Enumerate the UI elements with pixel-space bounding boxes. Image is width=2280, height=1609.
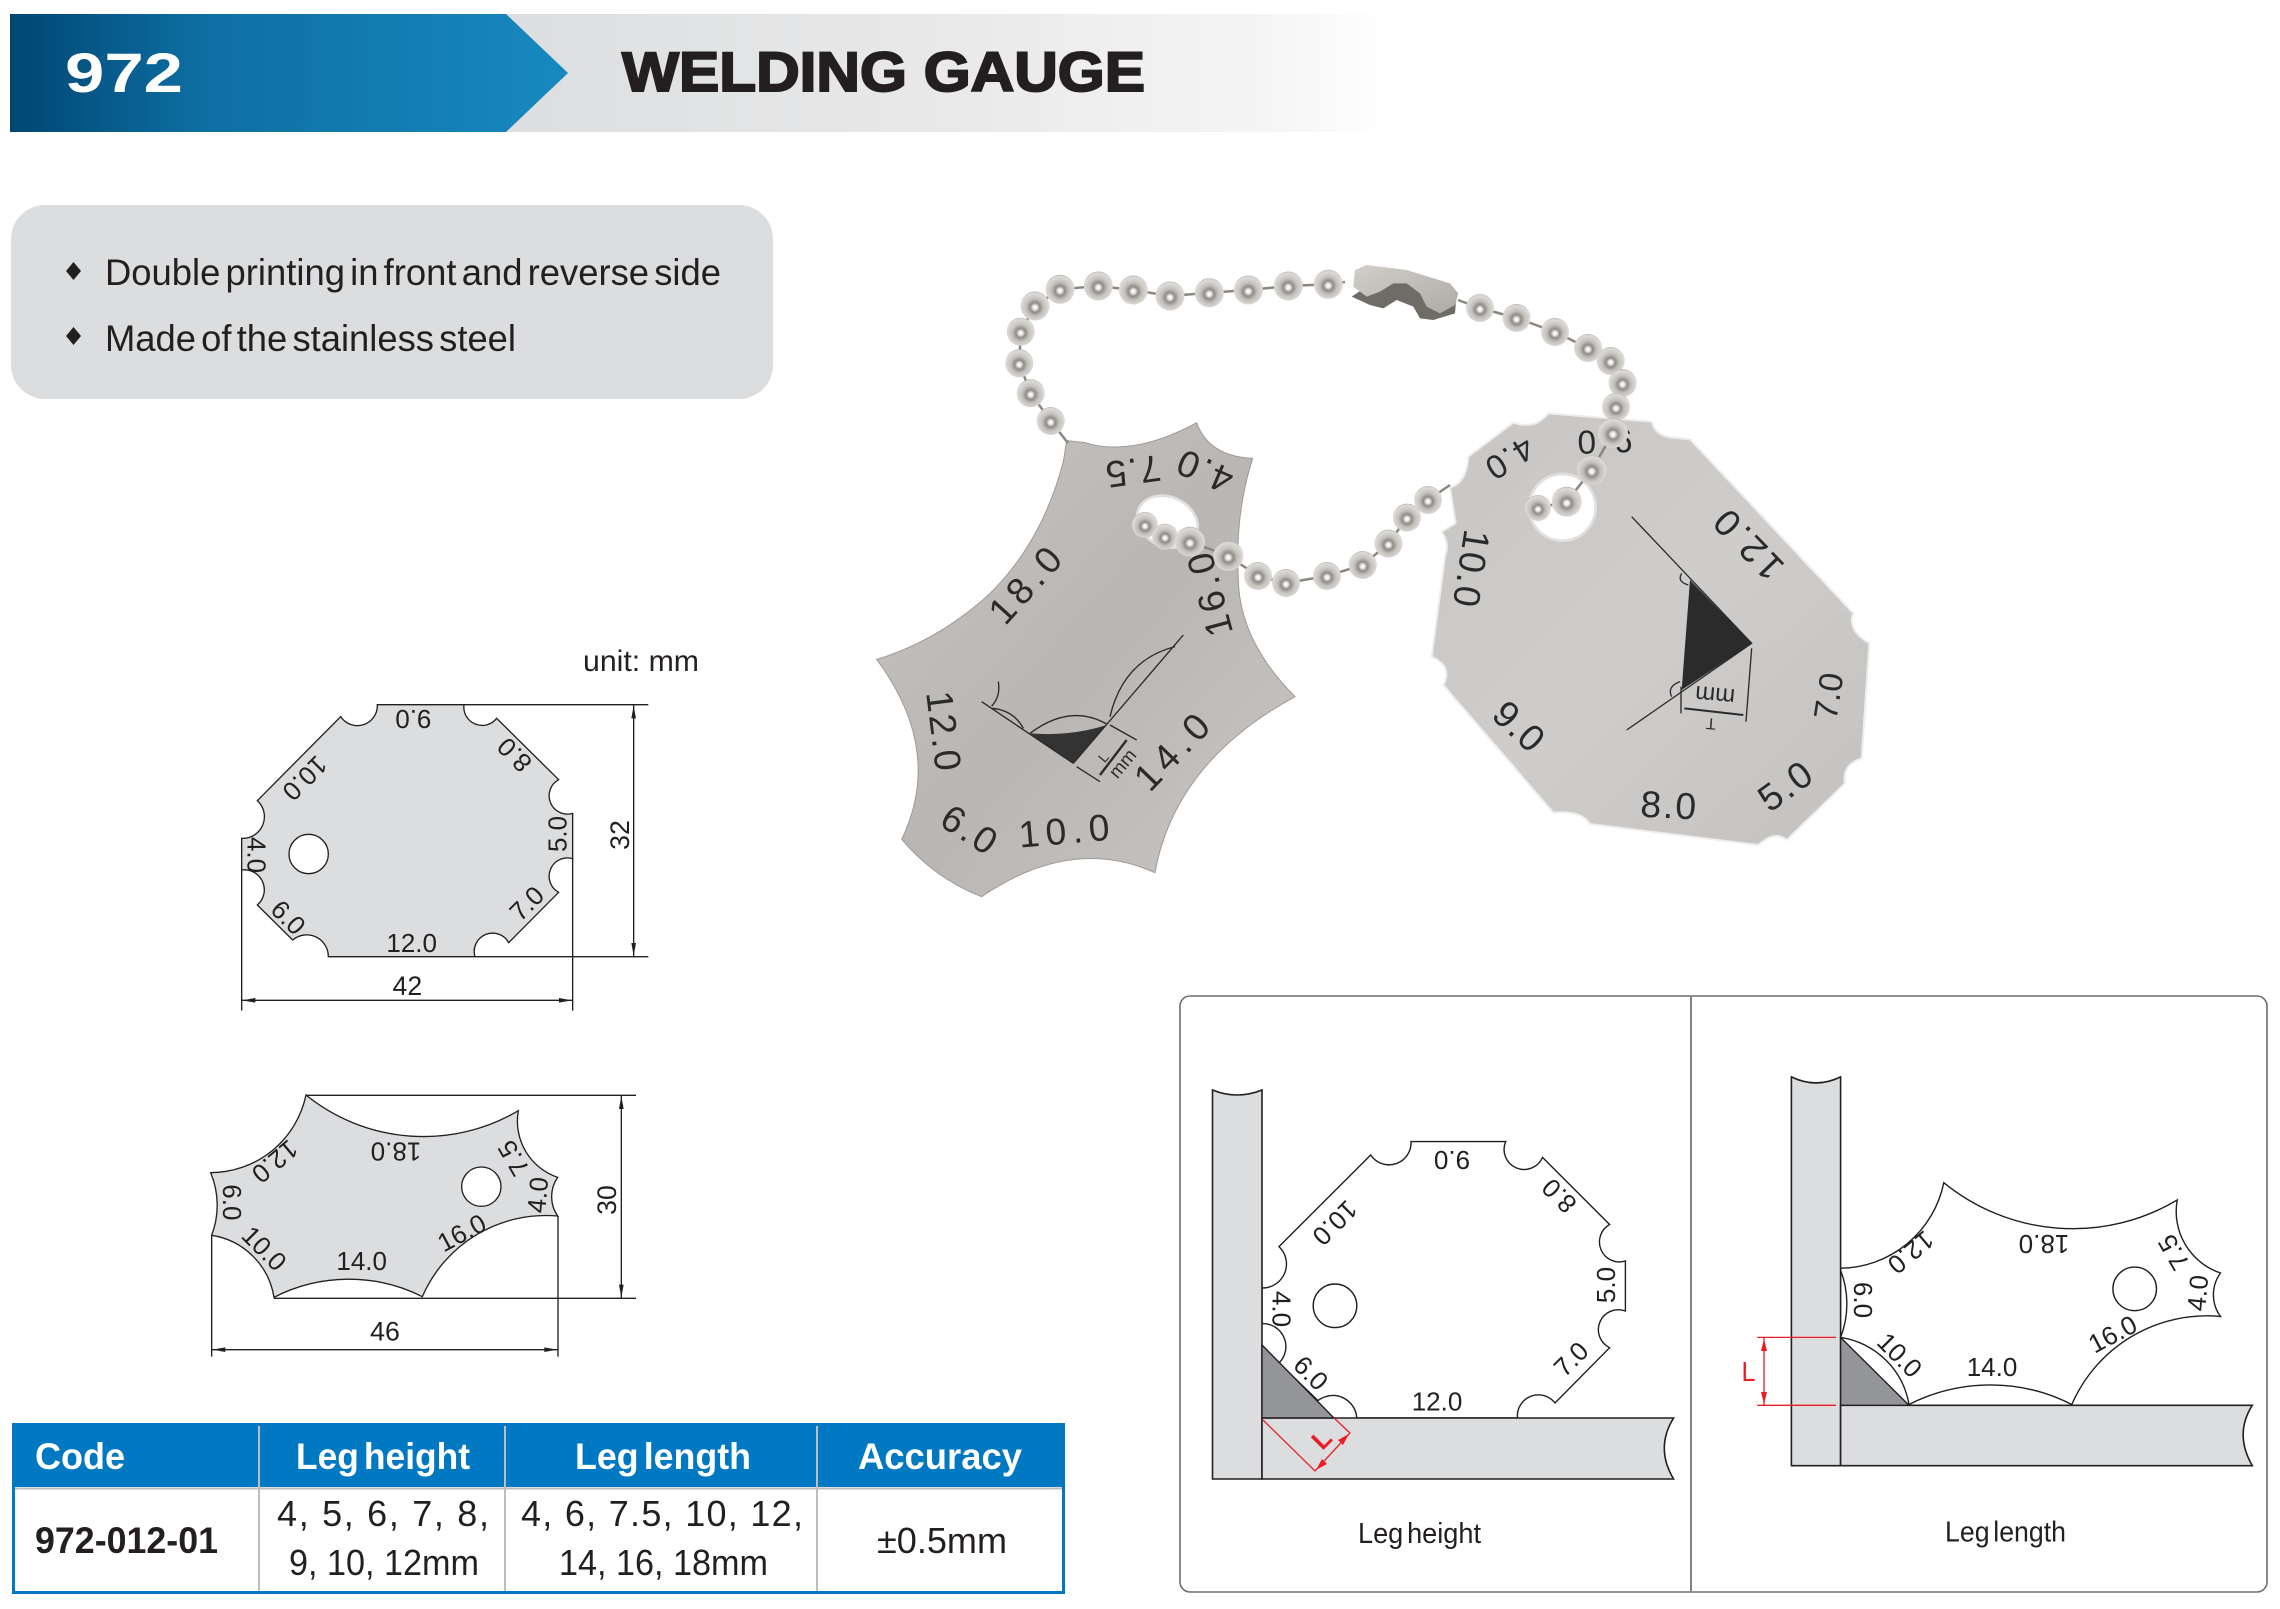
- scale labels: 9.0: [1434, 1145, 1470, 1175]
- table body values: 972-012-01: [35, 1520, 218, 1561]
- left tag scale numbers: 10.0: [1017, 806, 1111, 856]
- product number: 972: [65, 41, 183, 104]
- table body values: 4, 5, 6, 7, 8,: [277, 1493, 489, 1534]
- scale labels: 42: [393, 971, 422, 1001]
- left tag scale numbers: 7.5: [1103, 447, 1163, 496]
- right tag scale numbers: 5.0: [1750, 752, 1820, 820]
- scale labels: 4.0: [1266, 1291, 1296, 1327]
- header labels: Accuracy: [858, 1436, 1022, 1477]
- scale labels: [242, 704, 635, 1001]
- caption: Leg length: [1945, 1516, 2066, 1548]
- left tag scale numbers: 12.0: [918, 688, 970, 773]
- scale labels: 7.0: [1548, 1336, 1594, 1382]
- table body values: 4, 6, 7.5, 10, 12,: [521, 1493, 803, 1534]
- scale labels: 8.0: [491, 732, 538, 778]
- left gauge tag photo: [877, 423, 1295, 897]
- dimension drawing: star gauge: [211, 1095, 636, 1357]
- right tag scale numbers: 10.0: [1445, 527, 1498, 610]
- scale labels: 10.0: [236, 1220, 293, 1277]
- product number tab: [10, 14, 568, 132]
- diagram: leg height: [1212, 1090, 1674, 1550]
- chain clasp: [1352, 265, 1458, 320]
- scale labels: 12.0: [1882, 1225, 1940, 1280]
- scale labels: 5.0: [542, 816, 572, 852]
- title: WELDING GAUGE: [622, 40, 1145, 103]
- scale labels: 46: [370, 1317, 400, 1347]
- table body values: 14, 16, 18mm: [559, 1542, 768, 1583]
- dimension lines: [212, 1095, 636, 1357]
- header labels: [35, 1436, 1022, 1477]
- mounting hole: [462, 1167, 501, 1206]
- scale labels: [1266, 1145, 1621, 1416]
- right tag scale numbers: 9.0: [1485, 692, 1553, 760]
- mounting hole: [289, 834, 328, 874]
- scale labels: 18.0: [371, 1137, 421, 1167]
- unit note: unit: mm: [583, 645, 699, 678]
- weld bead: [1262, 1345, 1334, 1418]
- right tag weld symbol: mm: [1694, 680, 1736, 710]
- left tag scale numbers: 18.0: [980, 538, 1070, 632]
- weld bead: [1841, 1337, 1909, 1405]
- left tag scale numbers: 14.0: [1125, 705, 1218, 799]
- red leg length dimension: L: [1742, 1356, 1756, 1387]
- right tag scale numbers: 8.0: [1639, 783, 1697, 827]
- panel: features: [11, 205, 773, 399]
- gauge outline: [1262, 1142, 1625, 1418]
- table body values: [35, 1493, 1007, 1583]
- scale labels: 14.0: [1967, 1352, 2017, 1382]
- right tag weld symbol: [1627, 517, 1752, 732]
- gauge outline: [211, 1095, 558, 1297]
- product photo: [877, 265, 1869, 897]
- left tag weld symbol: L: [1095, 749, 1112, 765]
- right tag scale numbers: 7.0: [1808, 670, 1851, 722]
- horizontal plate: [1841, 1405, 2252, 1466]
- left tag scale numbers: 6.0: [933, 796, 1005, 863]
- scale labels: 6.0: [217, 1184, 247, 1220]
- ball chain: [1005, 265, 1637, 597]
- left tag scale numbers: 4.0: [1171, 441, 1239, 502]
- header labels: Code: [35, 1436, 125, 1477]
- scale labels: 5.0: [1591, 1267, 1621, 1303]
- scale labels: 16.0: [2083, 1309, 2142, 1359]
- scale labels: [1848, 1225, 2214, 1384]
- vertical plate: [1791, 1077, 1841, 1466]
- right tag scale numbers: 9.0: [1577, 421, 1633, 460]
- scale labels: 18.0: [2019, 1229, 2069, 1259]
- scale labels: 9.0: [395, 704, 431, 734]
- horizontal plate: [1262, 1418, 1674, 1479]
- scale labels: 7.0: [503, 880, 550, 927]
- right tag scale numbers: [1445, 421, 1851, 827]
- left tag scale numbers: [918, 441, 1241, 863]
- scale labels: 8.0: [1536, 1173, 1582, 1219]
- scale labels: 7.5: [491, 1135, 535, 1181]
- diagram: leg length: [1742, 1077, 2252, 1548]
- table body values: 9, 10, 12mm: [289, 1542, 479, 1583]
- dimension lines: [242, 705, 648, 1011]
- dimension drawing: octagonal gauge: [242, 704, 648, 1011]
- table header row: [12, 1423, 1065, 1487]
- header labels: Leg height: [296, 1436, 470, 1477]
- scale labels: 6.0: [265, 894, 312, 941]
- left tag weld symbol: [982, 635, 1183, 782]
- scale labels: 7.5: [2152, 1229, 2196, 1276]
- right gauge tag photo: [1432, 413, 1869, 845]
- dimension arrows: [242, 705, 636, 1003]
- left tag scale numbers: 16.0: [1178, 548, 1241, 641]
- red leg height dimension: [1263, 1418, 1350, 1471]
- red leg length dimension: [1742, 1337, 1836, 1405]
- table body values: ±0.5mm: [877, 1520, 1007, 1561]
- specification table: [12, 1423, 1065, 1592]
- scale labels: 4.0: [242, 837, 272, 873]
- header banner: [10, 14, 1390, 132]
- bullet two: Made of the stainless steel: [105, 318, 516, 359]
- left tag weld symbol: mm: [1104, 745, 1140, 782]
- gauge outline: [242, 705, 573, 957]
- scale labels: 6.0: [1848, 1282, 1878, 1318]
- header labels: Leg length: [575, 1436, 751, 1477]
- scale labels: 16.0: [432, 1208, 491, 1258]
- scale labels: 4.0: [2181, 1274, 2214, 1312]
- scale labels: 14.0: [336, 1246, 387, 1276]
- scale labels: 4.0: [521, 1176, 554, 1214]
- scale labels: 12.0: [386, 928, 437, 958]
- scale labels: 32: [605, 820, 635, 850]
- scale labels: [217, 1134, 622, 1347]
- scale labels: 10.0: [1306, 1194, 1363, 1251]
- right tag weld symbol: T: [1705, 714, 1717, 732]
- bullet one: Double printing in front and reverse side: [105, 252, 721, 293]
- red leg height dimension: L: [1305, 1423, 1338, 1455]
- panel: usage diagrams: [1180, 996, 2267, 1592]
- right tag scale numbers: 4.0: [1478, 428, 1540, 486]
- scale labels: 6.0: [1288, 1350, 1334, 1396]
- caption: Leg height: [1358, 1518, 1481, 1550]
- scale labels: 10.0: [276, 750, 333, 807]
- dimension arrows: [212, 1096, 624, 1352]
- scale labels: 10.0: [1871, 1327, 1928, 1384]
- vertical plate: [1212, 1090, 1262, 1479]
- right tag scale numbers: 12.0: [1705, 501, 1792, 589]
- scale labels: 12.0: [1412, 1387, 1462, 1417]
- scale labels: 30: [592, 1185, 622, 1215]
- gauge outline: [1840, 1183, 2220, 1404]
- scale labels: 12.0: [246, 1134, 304, 1189]
